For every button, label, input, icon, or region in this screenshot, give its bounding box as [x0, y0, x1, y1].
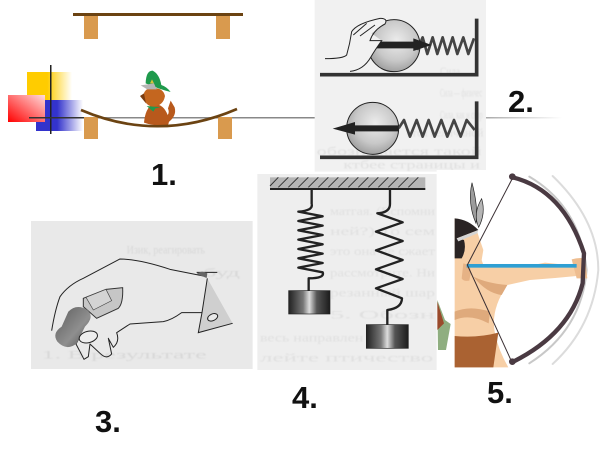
panel 1: bent bench with cat — [81, 71, 237, 139]
hand outline — [52, 259, 207, 359]
faint book text — [260, 204, 436, 365]
faint book text: Изик, реагировать — [127, 242, 205, 256]
panel 5: archer drawing a bow — [437, 170, 598, 370]
faint book text — [317, 64, 484, 171]
faint book text: ется величиной — [407, 126, 484, 140]
faint book text: обозначается такой — [317, 144, 483, 158]
faint book text: лейте птичество — [260, 351, 433, 365]
label 1: 1. — [151, 157, 177, 192]
cuff — [198, 278, 233, 333]
arrow — [467, 264, 577, 268]
rubber ball — [55, 307, 91, 347]
right spring and weight — [366, 190, 408, 348]
hands — [462, 263, 471, 281]
quiver fragment — [437, 300, 451, 350]
faint book text: матгая. (Вспомни — [330, 204, 436, 218]
loincloth — [455, 333, 498, 367]
left spring and weight — [289, 190, 330, 314]
panel 4: springs with weights — [257, 174, 437, 370]
faint book text: ней?) То сем — [330, 224, 436, 238]
label 5: 5. — [487, 375, 513, 410]
label 4: 4. — [292, 380, 318, 415]
faint book text: буд — [203, 266, 240, 280]
faint book text: ктбее страницы и — [343, 157, 481, 171]
faint book text: весь направлен — [260, 331, 364, 345]
faint book text — [42, 242, 240, 361]
bow string — [467, 177, 513, 362]
faint book text: Сила, как и скор — [440, 107, 483, 121]
upper: hand compressing spring — [320, 18, 477, 75]
panel 3: hand squeezing rubber — [31, 221, 253, 369]
faint book text: 1. В результате — [42, 347, 207, 361]
curled fingers — [83, 288, 123, 318]
bow — [513, 177, 584, 362]
ceiling — [270, 177, 425, 190]
body — [455, 218, 577, 367]
panel 1: bench without load — [73, 13, 243, 39]
label 2: 2. — [508, 84, 534, 119]
label 3: 3. — [95, 404, 121, 439]
faint book text: Сила — физичес — [440, 86, 482, 100]
lower: released spring — [320, 101, 477, 157]
faint book text: Сила — [440, 64, 461, 78]
panel 2: ball and spring — [315, 0, 486, 172]
motion arcs — [529, 176, 598, 364]
faint book text: рассмотрите. Ни — [330, 266, 436, 280]
faint book text: резанный шар — [330, 286, 435, 300]
faint book text: это она не сжает — [330, 244, 436, 258]
icon: cat with green hat — [140, 71, 175, 125]
decorative coloured squares — [8, 65, 562, 134]
feathers — [470, 183, 477, 223]
thumb — [78, 329, 99, 345]
faint book text: 5. Обозн — [330, 307, 436, 321]
